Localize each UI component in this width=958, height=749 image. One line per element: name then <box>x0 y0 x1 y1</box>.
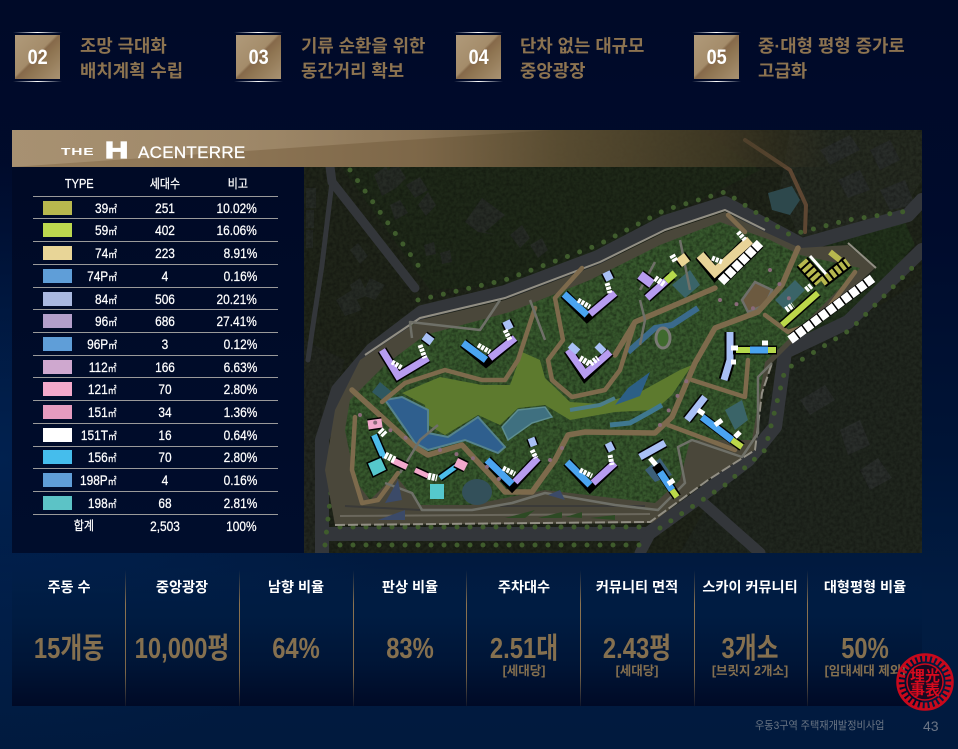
badge 03 <box>236 35 281 79</box>
table header <box>65 177 248 191</box>
title 04 <box>520 36 644 81</box>
row 59: 16.06% <box>217 223 257 238</box>
building group south-east <box>687 397 742 447</box>
stat: 남향 비율 <box>268 580 324 665</box>
row total <box>74 519 257 534</box>
plaza blocks <box>378 480 565 520</box>
row 198P: 198P㎡ <box>80 473 117 488</box>
row total: 합계 <box>74 519 94 533</box>
heading item 05 <box>693 32 905 82</box>
heading item 02 <box>14 32 183 82</box>
badge 03: 03 <box>248 46 269 69</box>
row 74 <box>43 246 257 261</box>
building group west <box>382 336 432 376</box>
building group north-west <box>463 321 515 362</box>
row 96P: 3 <box>162 337 168 352</box>
site ground <box>325 212 875 525</box>
table header: TYPE <box>65 177 94 191</box>
row 112: 6.63% <box>223 360 257 375</box>
stat: 커뮤니티 면적: 커뮤니티 면적 <box>596 580 678 596</box>
stat: 대형평형 비율: 50% <box>841 633 889 665</box>
table header: 세대수 <box>150 177 180 191</box>
stat: 주차대수: 2.51대 <box>490 633 558 665</box>
row 198 <box>43 496 257 511</box>
water features <box>372 186 805 505</box>
gray walkways <box>385 240 772 510</box>
title 05: 고급화 <box>758 61 807 81</box>
logo THE H ACENTERRE <box>61 137 246 163</box>
building group east <box>724 332 777 380</box>
stone paths <box>352 215 855 503</box>
row 96P: 0.12% <box>223 337 257 352</box>
row 96: 27.41% <box>217 314 257 329</box>
stat: 커뮤니티 면적: 2.43평 <box>603 633 671 665</box>
building group south-centre east <box>640 443 677 497</box>
row 121: 70 <box>158 382 172 397</box>
stat: 커뮤니티 면적: [세대당] <box>616 664 658 678</box>
row 151: 1.36% <box>223 405 257 420</box>
red seal stamp: 事表 <box>910 679 940 700</box>
site plan map <box>304 130 922 553</box>
title 02: 배치계획 수립 <box>80 61 183 81</box>
south podium strips <box>340 506 650 520</box>
row 74P <box>43 269 257 284</box>
red seal stamp: 埋光 <box>910 665 940 686</box>
row 74P: 4 <box>162 269 168 284</box>
stat: 스카이 커뮤니티: 스카이 커뮤니티 <box>702 580 798 596</box>
row 39: 39㎡ <box>95 201 117 216</box>
row 84: 20.21% <box>217 292 257 307</box>
row 59: 402 <box>155 223 175 238</box>
row 156: 2.80% <box>223 450 257 465</box>
white towers north <box>722 244 760 281</box>
stat: 대형평형 비율: [임대세대 제외] <box>825 664 905 678</box>
row 112: 166 <box>155 360 175 375</box>
building group north <box>564 272 615 317</box>
row 39: 10.02% <box>217 201 257 216</box>
row 74: 74㎡ <box>95 246 117 261</box>
stats panel background <box>12 566 922 706</box>
stat: 주동 수: 15개동 <box>34 633 104 665</box>
row total: 2,503 <box>150 519 180 534</box>
badge 05: 05 <box>706 46 727 69</box>
logo THE H ACENTERRE: ACENTERRE <box>138 143 246 162</box>
stat: 중앙광장: 중앙광장 <box>156 580 208 596</box>
row 74: 8.91% <box>223 246 257 261</box>
forest texture <box>304 130 922 553</box>
row 59: 59㎡ <box>95 223 117 238</box>
olive building group <box>802 252 848 282</box>
row 151: 34 <box>158 405 172 420</box>
stat: 주차대수: 주차대수 <box>498 580 550 596</box>
row 151 <box>43 405 257 420</box>
row 121: 121㎡ <box>88 382 117 397</box>
row 151: 151㎡ <box>88 405 117 420</box>
stat: 스카이 커뮤니티 <box>702 580 798 678</box>
row 156: 70 <box>158 450 172 465</box>
row 198: 68 <box>158 496 172 511</box>
row 198P: 0.16% <box>223 473 257 488</box>
row 198: 198㎡ <box>88 496 117 511</box>
pink teal building west <box>367 423 407 477</box>
row 112 <box>43 360 257 375</box>
row 96: 686 <box>155 314 175 329</box>
table header: 비고 <box>228 177 248 191</box>
building group south-centre <box>487 438 538 486</box>
band highlight wedge <box>12 130 552 167</box>
row 156 <box>43 450 257 465</box>
row 151T: 0.64% <box>223 428 257 443</box>
row 151T: 151T㎡ <box>81 428 117 443</box>
title 03 <box>301 36 425 81</box>
page number: 43 <box>923 718 939 734</box>
row 198P <box>43 473 257 488</box>
row 74P: 0.16% <box>223 269 257 284</box>
heading item 03 <box>235 32 425 82</box>
row 96: 96㎡ <box>95 314 117 329</box>
row 96P: 96P㎡ <box>87 337 117 352</box>
title 03: 기류 순환을 위한 <box>301 36 425 56</box>
row 151T <box>43 428 257 443</box>
gold title band <box>12 130 803 167</box>
row 84: 506 <box>155 292 175 307</box>
row 84: 84㎡ <box>95 292 117 307</box>
row 198P: 4 <box>162 473 168 488</box>
badge 05 <box>694 35 739 79</box>
tree texture <box>346 222 860 505</box>
stat: 주동 수 <box>34 580 104 665</box>
stat: 커뮤니티 면적 <box>596 580 678 678</box>
building group south <box>567 443 615 487</box>
stat: 대형평형 비율 <box>824 580 906 678</box>
landscape greenery <box>345 222 860 505</box>
title 03: 동간거리 확보 <box>301 61 404 81</box>
stat: 남향 비율: 남향 비율 <box>268 580 324 596</box>
row 59 <box>43 223 257 238</box>
badge 02: 02 <box>27 46 48 69</box>
row total: 100% <box>227 519 257 534</box>
row 121 <box>43 382 257 397</box>
title 04: 중앙광장 <box>520 61 585 81</box>
surrounding forest and houses <box>304 130 922 553</box>
title 04: 단차 없는 대규모 <box>520 36 644 56</box>
stat: 중앙광장: 10,000평 <box>135 633 229 665</box>
buildings <box>367 232 873 499</box>
row 74P: 74P㎡ <box>87 269 117 284</box>
title 02 <box>80 36 183 81</box>
white towers east <box>792 279 872 338</box>
row 198: 2.81% <box>223 496 257 511</box>
row 84 <box>43 292 257 307</box>
blossom trees <box>360 270 790 490</box>
row 121: 2.80% <box>223 382 257 397</box>
stat: 남향 비율: 64% <box>272 633 320 665</box>
lime building <box>782 285 818 325</box>
badge 04 <box>456 35 501 79</box>
stat: 스카이 커뮤니티: [브릿지 2개소] <box>712 664 788 678</box>
stat: 주동 수: 주동 수 <box>47 580 91 596</box>
row 96 <box>43 314 257 329</box>
pink teal building south <box>415 462 466 499</box>
beige building group <box>700 232 750 274</box>
row 151T: 16 <box>158 428 172 443</box>
title 02: 조망 극대화 <box>80 36 167 56</box>
stat: 판상 비율: 83% <box>386 633 434 665</box>
stat: 판상 비율 <box>382 580 438 665</box>
title 05: 중·대형 평형 증가로 <box>758 36 905 56</box>
building group north-centre <box>640 255 686 298</box>
badge 02 <box>15 35 60 79</box>
surrounding roads <box>308 140 922 553</box>
footer project name: 우동3구역 주택재개발정비사업 <box>755 720 884 732</box>
row 112: 112㎡ <box>89 360 117 375</box>
stat: 스카이 커뮤니티: 3개소 <box>722 633 778 665</box>
stat: 판상 비율: 판상 비율 <box>382 580 438 596</box>
title 05 <box>758 36 905 81</box>
logo THE H ACENTERRE: THE <box>61 147 94 158</box>
row 156: 156㎡ <box>88 450 117 465</box>
site boundary wall <box>335 210 876 525</box>
stat: 주차대수: [세대당] <box>503 664 545 678</box>
row 74: 223 <box>155 246 175 261</box>
building group centre hill <box>568 345 610 376</box>
row 39: 251 <box>155 201 175 216</box>
red seal stamp <box>896 653 954 711</box>
roadside trees <box>325 170 915 545</box>
central lawn <box>402 352 692 435</box>
badge 04: 04 <box>468 46 489 69</box>
stat: 대형평형 비율: 대형평형 비율 <box>824 580 906 596</box>
row 96P <box>43 337 257 352</box>
stat: 중앙광장 <box>135 580 229 665</box>
row 39 <box>43 201 257 216</box>
logo THE H ACENTERRE: H <box>105 137 128 163</box>
stat: 주차대수 <box>490 580 558 678</box>
central plaza ring <box>742 282 772 312</box>
legend table panel <box>12 167 304 553</box>
heading item 04 <box>455 32 644 82</box>
